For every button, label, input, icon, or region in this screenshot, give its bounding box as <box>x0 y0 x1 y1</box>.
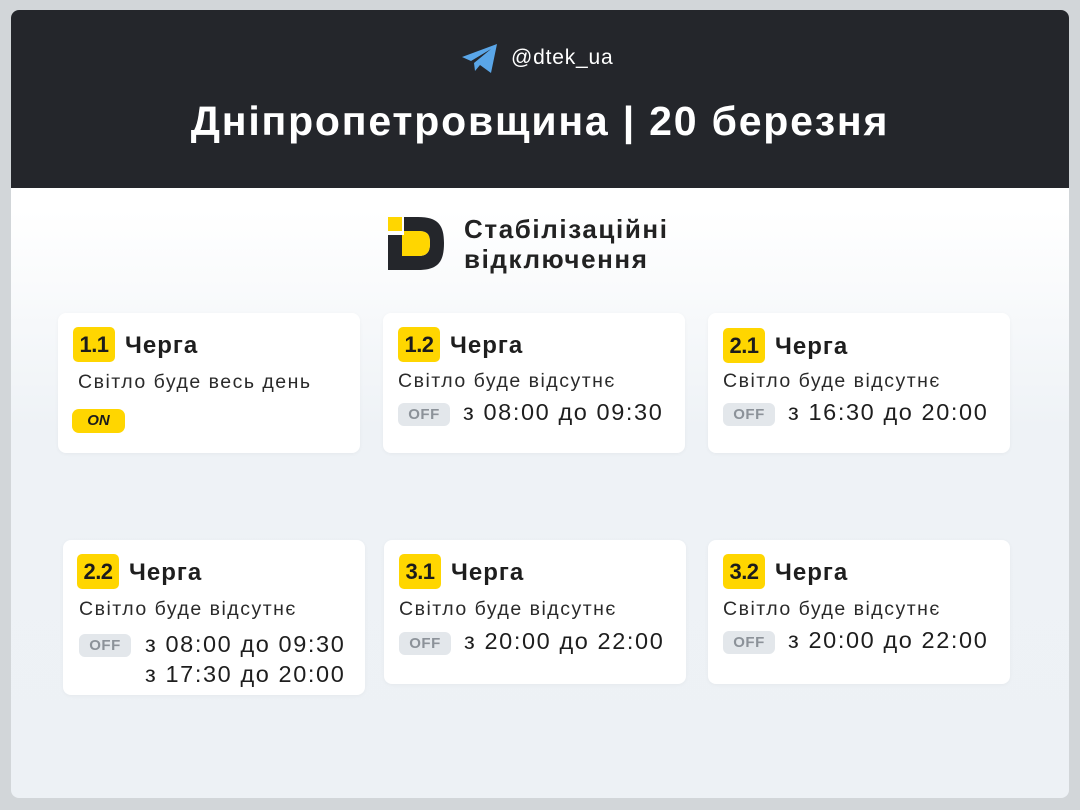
panel: 3.1: OFF <box>409 635 441 652</box>
icon: telegram <box>462 44 497 73</box>
panel: 2.1: Світло буде відсутнє <box>723 370 941 392</box>
subtitle: Стабілізаційні <box>464 214 669 244</box>
panel: 1.2: з 08:00 до 09:30 <box>463 399 663 425</box>
panel: 2.1: Черга <box>775 333 848 360</box>
panel: 2.1: OFF <box>733 406 765 423</box>
panel: 1.2: OFF <box>408 406 440 423</box>
panel: 3.1 <box>384 540 686 684</box>
panel: 2.2: Світло буде відсутнє <box>79 598 297 620</box>
handle: @dtek_ua <box>511 46 613 69</box>
panel: 1.1: Світло буде весь день <box>78 371 312 393</box>
panel: 2.1: з 16:30 до 20:00 <box>788 399 988 425</box>
panel: 2.2: з 17:30 до 20:00 <box>145 661 345 687</box>
panel: 3.2: OFF <box>733 634 765 651</box>
panel: 3.2: 3.2 <box>729 559 759 584</box>
panel: 1.2 <box>383 313 685 453</box>
panel: 2.2: 2.2 <box>83 559 113 584</box>
panel: 3.2: Світло буде відсутнє <box>723 598 941 620</box>
panel: 2.1 <box>708 313 1010 453</box>
panel: 1.2: 1.2 <box>404 332 434 357</box>
panel: 3.1: Світло буде відсутнє <box>399 598 617 620</box>
panel: 3.2: з 20:00 до 22:00 <box>788 627 988 653</box>
title: Дніпропетровщина | 20 березня <box>191 98 889 144</box>
panel: 2.2: з 08:00 до 09:30 <box>145 631 345 657</box>
logo <box>388 217 444 270</box>
panel: 3.1: 3.1 <box>405 559 435 584</box>
subtitle: відключення <box>464 244 649 274</box>
panel: 3.2 <box>708 540 1010 684</box>
panel: 2.2 <box>63 540 365 695</box>
panel: 1.1: ON <box>87 412 110 429</box>
panel: 1.1: Черга <box>125 332 198 359</box>
panel: 1.1: 1.1 <box>79 332 109 357</box>
panel: 2.2: OFF <box>89 637 121 654</box>
panel: 2.1: 2.1 <box>729 333 759 358</box>
panel: 3.1: Черга <box>451 559 524 586</box>
panel: 1.2: Черга <box>450 332 523 359</box>
subtitle <box>464 214 669 274</box>
header <box>11 10 1069 188</box>
panel: 1.2: Світло буде відсутнє <box>398 370 616 392</box>
panel: 3.2: Черга <box>775 559 848 586</box>
panel: 2.2: Черга <box>129 559 202 586</box>
panel: 1.1 <box>58 313 360 453</box>
panel: 3.1: з 20:00 до 22:00 <box>464 628 664 654</box>
